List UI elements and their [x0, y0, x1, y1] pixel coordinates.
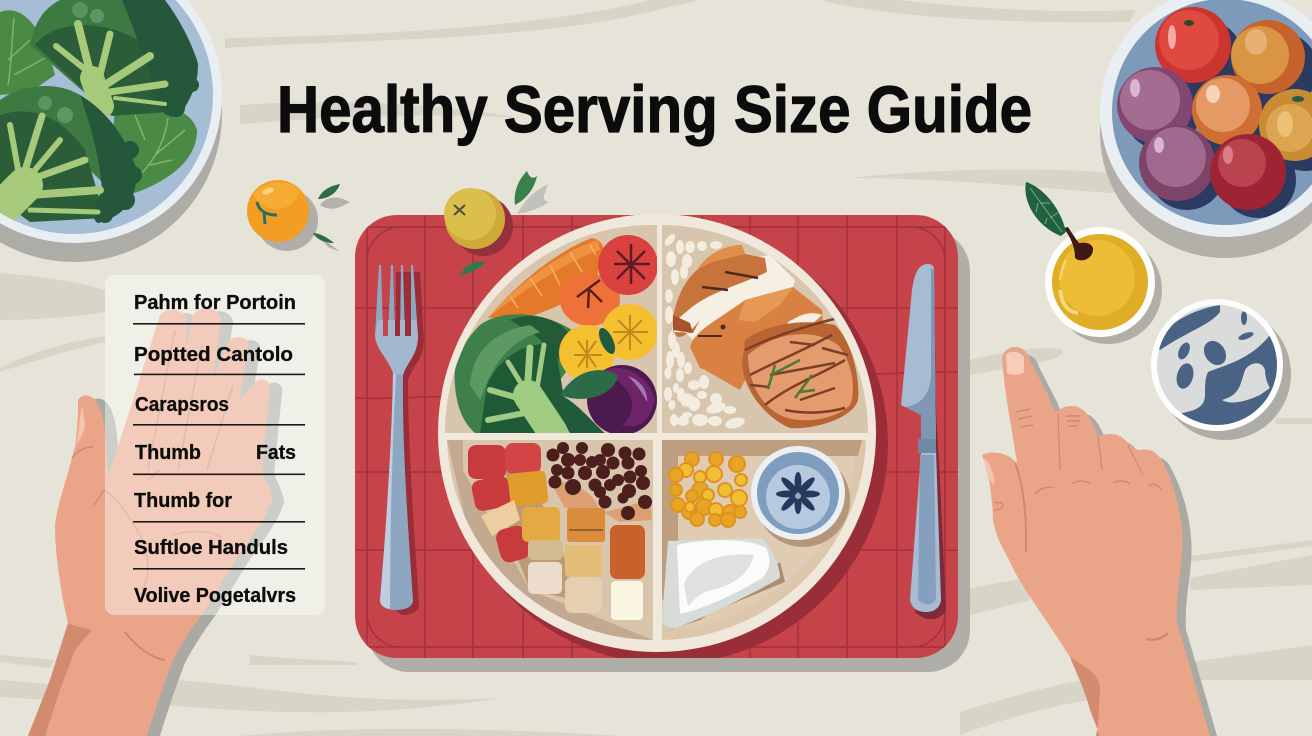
placemat tray [355, 215, 970, 672]
top-left compartment: vegetables [445, 225, 658, 440]
bowl of broccoli and leafy greens [0, 0, 222, 262]
orange slice [560, 274, 620, 326]
left hand [28, 308, 284, 736]
yogurt dollop [662, 538, 785, 630]
dark red fruit [1210, 134, 1286, 210]
hand shadow [991, 354, 1219, 736]
row: Thumb for: Thumb for [134, 489, 232, 512]
portion list panel [105, 275, 325, 615]
fork [375, 265, 424, 615]
bottom-right compartment: corn, dip and yogurt [662, 440, 866, 640]
corn kernels [669, 452, 747, 527]
rice [663, 232, 746, 430]
right hand pointing [982, 347, 1219, 736]
row: Suftloe Handuls: Suftloe Handuls [134, 536, 288, 559]
yellow sauce cup with leaf [1025, 182, 1162, 344]
row: Carapsros: Carapsros [135, 393, 229, 416]
amber fruit [1259, 89, 1312, 161]
small orange with leaves [247, 180, 350, 252]
patterned blue dish [1151, 299, 1291, 440]
eggplant [560, 365, 657, 435]
top-right compartment: rice and grilled chicken [662, 225, 868, 433]
row: Poptted Cantolo: Poptted Cantolo [134, 343, 293, 366]
row: Pahm for Portoin: Pahm for Portoin [134, 291, 296, 314]
yellow apple [444, 171, 549, 276]
divided plate [438, 214, 888, 664]
broccoli top head [30, 0, 199, 117]
blue dip bowl [751, 446, 850, 547]
leafy greens [0, 10, 197, 193]
row: Thumb / Fats: Fats [256, 441, 296, 464]
broccoli lower head [0, 86, 142, 223]
cubes of protein [468, 443, 645, 620]
carrot [488, 238, 604, 318]
title: Healthy Serving Size Guide [277, 72, 1032, 146]
peach [1192, 75, 1262, 145]
purple plum [1117, 67, 1193, 143]
broccoli [455, 314, 575, 440]
second plum [1139, 125, 1215, 201]
tomato slice [598, 235, 658, 295]
knife [901, 264, 946, 619]
grilled steak [742, 318, 858, 428]
row: Thumb / Fats: Thumb [135, 441, 201, 464]
yellow fruit slices [559, 304, 658, 381]
chicken pieces [680, 255, 795, 340]
dark beans [546, 442, 652, 520]
bottom-left compartment: proteins and beans [447, 440, 653, 640]
row: Thumb / Fats [133, 441, 305, 475]
bowl of mixed fruit [1100, 0, 1312, 258]
orange fruit [1231, 20, 1305, 94]
row: Volive Pogetalvrs: Volive Pogetalvrs [134, 584, 296, 607]
red fruit [1155, 7, 1231, 83]
